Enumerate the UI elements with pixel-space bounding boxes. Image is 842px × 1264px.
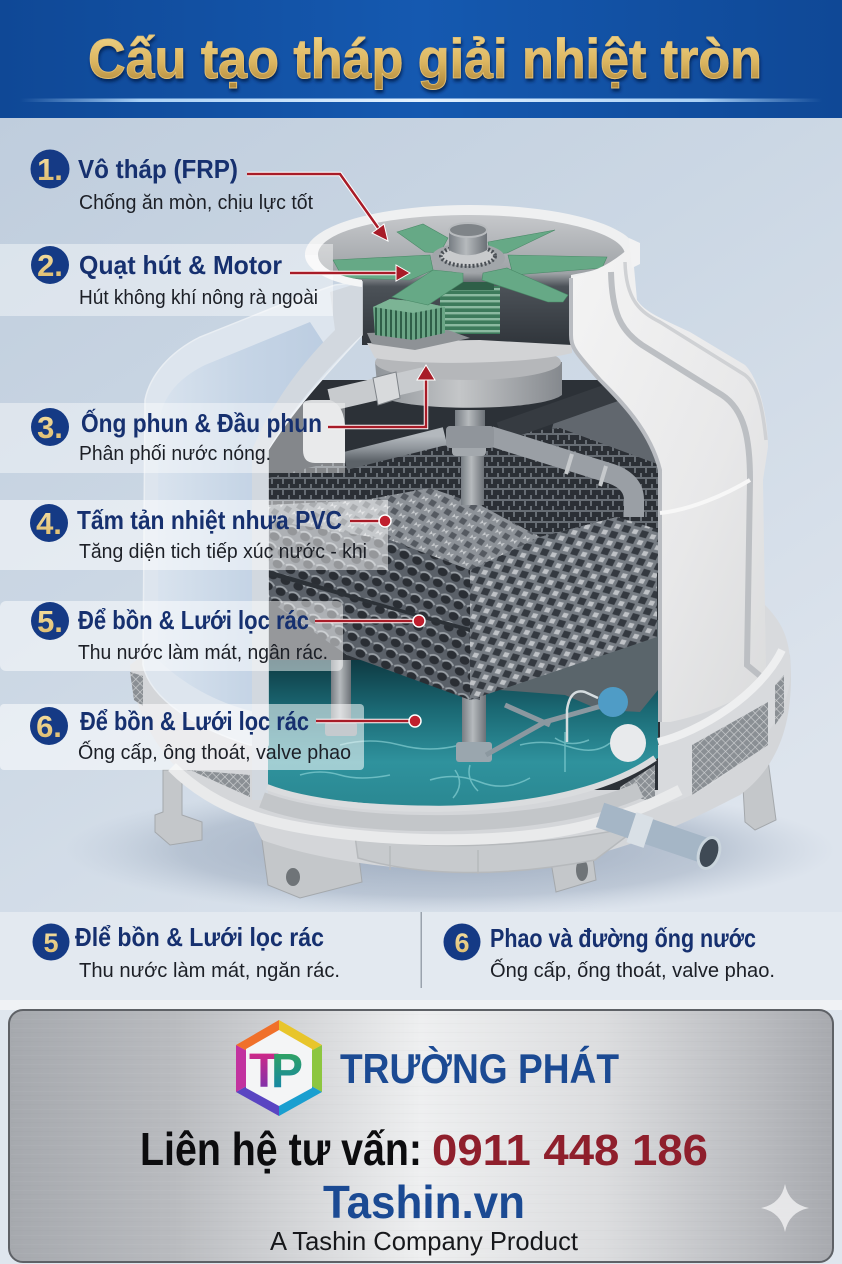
fan stack collar	[305, 205, 638, 345]
mesh screen far left	[130, 672, 143, 706]
tagline: A Tashin Company Product	[270, 1226, 579, 1256]
callout 1: tower shell	[30, 150, 313, 214]
white feed pipe	[303, 372, 425, 463]
page background	[0, 118, 842, 912]
phone number: 0911 448 186	[432, 1126, 708, 1175]
callout 6: basin and strainer: Ống cấp, ông thoát, valve phao	[78, 740, 351, 764]
callout 6: basin and strainer: Để bồn & Lưới lọc rác	[80, 706, 309, 736]
fill pack lower	[268, 568, 657, 700]
callout 6: basin and strainer	[30, 706, 351, 764]
arrow 2	[290, 265, 410, 281]
callout 5: basin and strainer: Thu nước làm mát, ngân rác.	[78, 642, 328, 664]
info item 5: Thu nước làm mát, ngăn rác.	[79, 960, 340, 982]
fan hub	[431, 223, 505, 273]
callout 4: PVC fill	[30, 504, 367, 563]
foot drain holes	[286, 859, 588, 886]
info item 5	[32, 922, 340, 982]
callout 6: basin and strainer: 6.	[36, 709, 62, 744]
callout 5: basin and strainer: 5.	[37, 604, 63, 639]
callout 1: tower shell: 1.	[37, 152, 63, 187]
pointer 6	[316, 715, 421, 727]
info item 5: Đlể bồn & Lưới lọc rác	[75, 922, 324, 952]
logo: P	[271, 1045, 303, 1098]
arrow 3	[328, 365, 435, 427]
left shell	[143, 255, 362, 800]
arrow 1	[247, 174, 388, 241]
mesh screen left	[187, 770, 250, 797]
website: Tashin.vn	[323, 1176, 525, 1228]
support columns	[325, 660, 492, 762]
mesh screen far right	[775, 675, 784, 725]
callout 3: spray pipes: Ống phun & Đầu phun	[81, 408, 322, 438]
label strip 4	[0, 500, 388, 570]
basin front rim	[172, 758, 680, 840]
lower ring and mesh	[130, 605, 790, 806]
motor	[367, 299, 470, 350]
basin skirt ribs	[355, 826, 640, 874]
float ball white	[610, 724, 646, 762]
cooling tower cutaway illustration	[65, 205, 835, 916]
sparkle watermark	[761, 1184, 809, 1232]
mesh screen near pipe	[620, 765, 655, 803]
spray pipes	[345, 388, 634, 517]
callout 2: fan and motor	[31, 246, 318, 309]
callout 4: PVC fill: Tấm tản nhiệt nhưa PVC	[77, 505, 342, 535]
drain pipe	[600, 815, 724, 871]
back wall	[540, 392, 660, 560]
machinery wall behind float	[500, 620, 658, 712]
tower base skirt	[130, 600, 791, 871]
float ball blue	[598, 687, 628, 717]
info item 5: 5	[43, 928, 59, 958]
callout 1: tower shell: Vô tháp (FRP)	[78, 154, 238, 184]
footer metal panel	[9, 1010, 833, 1262]
callout 1: tower shell: Chống ăn mòn, chịu lực tốt	[79, 192, 313, 214]
callout 3: spray pipes	[31, 408, 322, 465]
right shell	[570, 238, 768, 722]
callout 5: basin and strainer	[31, 602, 328, 664]
motor plate on top of drum	[367, 340, 572, 363]
callout 5: basin and strainer: Để bồn & Lưới lọc rác	[78, 605, 309, 635]
bottom info band	[0, 912, 842, 1010]
info item 6: Phao và đường ống nước	[490, 923, 756, 953]
info item 6	[444, 923, 775, 982]
pointer 4	[350, 515, 391, 527]
tower feet	[155, 760, 776, 898]
logo	[236, 1020, 322, 1116]
brand name: TRƯỜNG PHÁT	[340, 1044, 619, 1092]
water ripples	[300, 732, 610, 798]
fill pack upper	[268, 488, 660, 628]
tower interior	[268, 380, 660, 790]
float valve frame	[486, 691, 605, 755]
label strip 5	[0, 601, 343, 671]
callout 3: spray pipes: Phân phối nước nóng.	[79, 443, 271, 465]
header banner	[0, 0, 842, 118]
label strip 6	[0, 704, 364, 770]
info item 6: Ống cấp, ống thoát, valve phao.	[490, 958, 775, 982]
gearbox	[440, 282, 500, 334]
pointer 5	[315, 615, 425, 627]
fan blades	[333, 224, 607, 305]
fan plate drum	[375, 344, 562, 408]
callout 2: fan and motor: 2.	[37, 248, 63, 283]
label strip 3	[0, 403, 345, 473]
callout 2: fan and motor: Hút không khí nông rà ngoài	[79, 287, 318, 309]
callout 4: PVC fill: Tăng diện tich tiếp xúc nước - khi	[79, 541, 367, 563]
title: Cấu tạo tháp giải nhiệt tròn	[88, 27, 762, 90]
label strip 2	[0, 244, 333, 316]
water basin	[268, 660, 658, 806]
logo: T	[249, 1045, 279, 1098]
contact label: Liên hệ tư vấn:	[140, 1123, 422, 1175]
callout 2: fan and motor: Quạt hút & Motor	[79, 250, 282, 280]
ground shadow	[65, 784, 835, 916]
mesh screen right	[692, 702, 768, 795]
info item 6: 6	[454, 928, 470, 958]
rear fill grid	[268, 428, 660, 560]
callout 4: PVC fill: 4.	[36, 506, 62, 541]
callout 3: spray pipes: 3.	[37, 410, 63, 445]
